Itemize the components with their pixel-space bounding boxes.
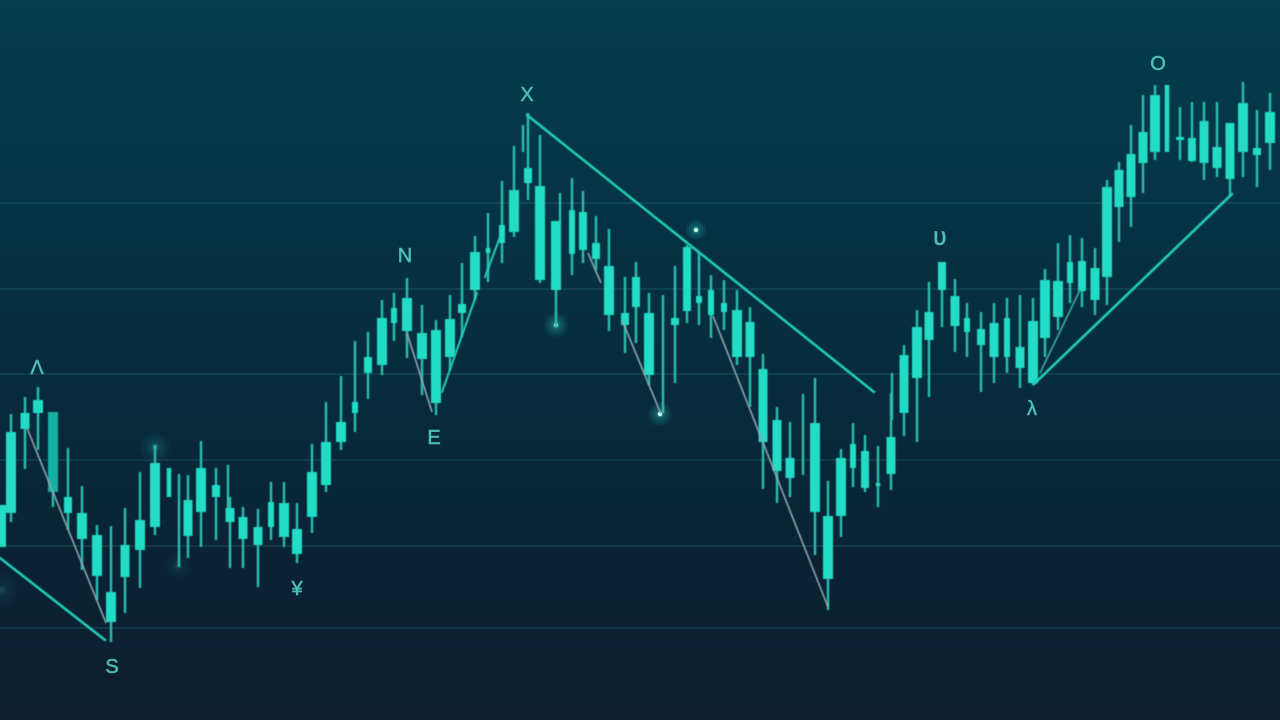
label N: N — [398, 245, 412, 267]
dimmed candle body — [48, 412, 58, 492]
candle bodies, medium — [25, 121, 1230, 577]
candlestick series — [2, 82, 1270, 642]
candle bodies, slim — [169, 85, 1167, 497]
label X: X — [520, 84, 534, 106]
label O: O — [1150, 53, 1166, 75]
label A: Λ — [30, 357, 44, 379]
candle bodies, wide — [11, 95, 1270, 622]
candle bodies, thin — [271, 210, 1070, 527]
label yen: ¥ — [290, 578, 303, 600]
label lambda: λ — [1027, 398, 1037, 420]
horizontal grid lines — [0, 203, 1280, 628]
teal trend lines — [0, 115, 1232, 640]
candle wicks — [11, 82, 1270, 642]
wave point labels — [30, 53, 1166, 678]
label S: S — [105, 656, 119, 678]
candle bodies, narrow — [2, 137, 1257, 547]
glow points — [0, 219, 707, 608]
label upsilon: ʋ — [933, 223, 947, 251]
label E: E — [427, 427, 441, 449]
thin grey pattern lines — [27, 253, 1080, 623]
